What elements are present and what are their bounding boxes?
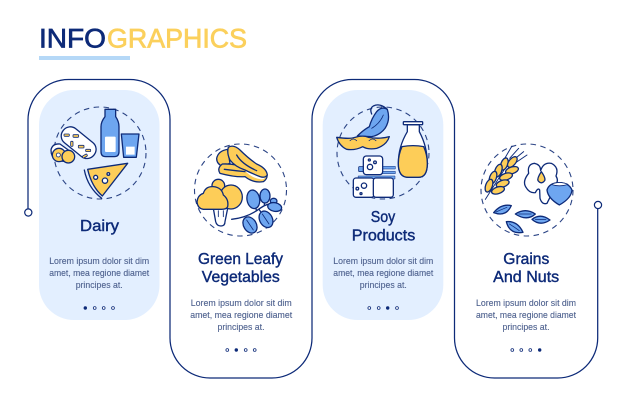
pagination: dairy bbox=[84, 306, 114, 310]
heading: green leafy vegetables bbox=[198, 251, 283, 286]
heading: green leafy vegetables: Green Leafy bbox=[198, 251, 283, 268]
text: soy description: principes at. bbox=[360, 280, 407, 290]
title underline bbox=[39, 56, 130, 60]
text: grains description bbox=[476, 298, 576, 332]
text: soy description: Lorem ipsum dolor sit dim bbox=[333, 256, 434, 266]
heading: soy products: Products bbox=[352, 228, 416, 245]
heading: grains and nuts: And Nuts bbox=[493, 269, 559, 286]
icon: soy products bbox=[337, 105, 429, 199]
heading: soy products bbox=[352, 209, 416, 245]
heading: soy products: Soy bbox=[371, 209, 395, 226]
title: GRAPHICS bbox=[107, 24, 247, 54]
pagination: vegetables bbox=[226, 348, 256, 352]
text: soy description: amet, mea regione diamet bbox=[333, 268, 434, 278]
panel: dairy background bbox=[39, 90, 160, 320]
text: dairy description: Lorem ipsum dolor sit dim bbox=[49, 256, 149, 266]
text: grains description: principes at. bbox=[502, 322, 550, 332]
panel: soy products background bbox=[323, 90, 443, 320]
icon: green leafy vegetables bbox=[194, 144, 286, 236]
pagination: soy bbox=[368, 306, 398, 310]
text: dairy description: amet, mea regione diamet bbox=[49, 268, 150, 278]
text: soy description bbox=[333, 256, 434, 290]
text: grains description: Lorem ipsum dolor sit dim bbox=[476, 298, 576, 308]
heading: grains and nuts: Grains bbox=[503, 251, 550, 268]
icon: grains and nuts bbox=[481, 144, 573, 236]
text: vegetables description: principes at. bbox=[218, 322, 264, 332]
text: vegetables description bbox=[190, 298, 293, 332]
text: dairy description bbox=[49, 256, 150, 290]
heading: green leafy vegetables: Vegetables bbox=[202, 269, 280, 286]
icon: dairy bbox=[51, 107, 146, 199]
title: INFO bbox=[39, 24, 106, 54]
pagination: grains bbox=[511, 348, 541, 352]
text: grains description: amet, mea regione diamet bbox=[476, 310, 576, 320]
title bbox=[39, 24, 247, 54]
text: vegetables description: amet, mea regione diamet bbox=[190, 310, 293, 320]
connecting outline bbox=[25, 80, 602, 378]
heading: dairy: Dairy bbox=[80, 218, 119, 235]
heading: grains and nuts bbox=[493, 251, 559, 286]
text: dairy description: principes at. bbox=[76, 280, 123, 290]
text: vegetables description: Lorem ipsum dolor sit dim bbox=[191, 298, 292, 308]
